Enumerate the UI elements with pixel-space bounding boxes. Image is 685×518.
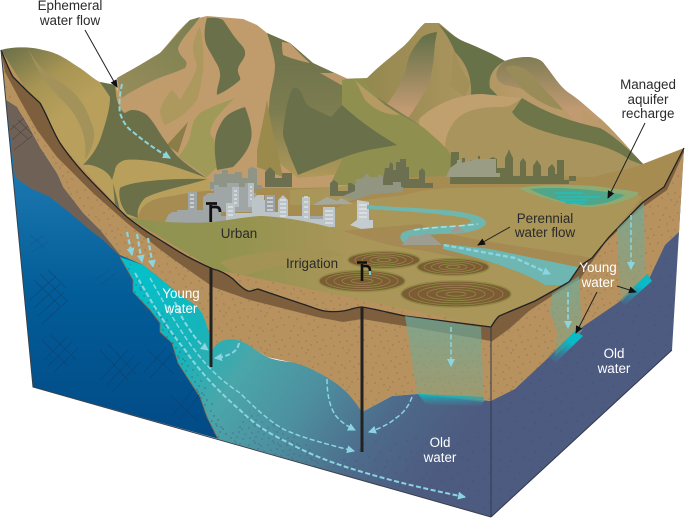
label: young water left: Young [162,286,200,301]
distant city skyline [203,149,576,212]
label: urban: Urban [221,226,257,241]
managed aquifer recharge pond [519,185,639,207]
leader arrow: young water lower lens [576,292,597,333]
outer edges of the left face [1,50,491,517]
label: old water centre: water [423,450,457,465]
brown soil layer [1,50,491,341]
speckled rock contact [125,266,223,439]
rocks beside the river [402,225,465,245]
label: managed aquifer recharge: aquifer [628,92,669,107]
panel: left cut face of the block [1,50,491,517]
mountain: left foothill [1,47,215,230]
label: young water right: Young [579,260,617,275]
surface outline [1,50,491,327]
leader arrow: perennial water flow [478,227,510,245]
label: ephemeral water flow: water flow [39,13,100,28]
brown soil layer [491,148,684,342]
label: young water left: water [164,301,198,316]
urban well [206,204,220,367]
urban city buildings [165,183,373,233]
flow arrows: dashed light blue [119,84,631,497]
bedrock fracture hatching [10,118,200,422]
deep blue bedrock [1,50,250,445]
perennial river [367,205,582,285]
groundwater body [120,257,491,517]
mountain range: right peaks [342,23,650,185]
label: perennial water flow: water flow [514,225,575,240]
label: perennial water flow: Perennial [517,211,573,226]
label: young water right: water [581,275,615,290]
infiltration column under floodplain [405,316,484,402]
sand layer [1,50,491,412]
leader arrow: ephemeral water flow [85,30,117,87]
young water lens: right upper [619,274,652,305]
label: irrigation: Irrigation [286,256,338,271]
block edges [491,327,672,517]
old water zone [491,148,684,517]
young water lens: right lower [548,331,583,362]
young water lens: centre [418,394,484,406]
label: managed aquifer recharge: Managed [620,77,676,92]
grey weathered rock [6,100,122,258]
surface outline [491,148,684,327]
land surface: back fields [127,148,684,327]
infiltration column under river [550,276,582,356]
leader arrow: young water upper lens [617,286,636,292]
label: managed aquifer recharge: recharge [622,106,674,121]
leader arrow: managed aquifer recharge [608,123,645,198]
label: old water right: Old [604,346,624,361]
label: old water centre: Old [430,435,450,450]
label: old water right: water [597,361,631,376]
mountain: central peak [117,16,455,190]
mountain: near slope on right [300,78,452,185]
infiltration column under recharge basin [617,203,645,302]
irrigation well [357,262,370,452]
foreground land [125,216,592,327]
panel: right cut face of the block [491,148,684,517]
sand layer [491,148,684,401]
irrigation crop circles [319,252,511,307]
